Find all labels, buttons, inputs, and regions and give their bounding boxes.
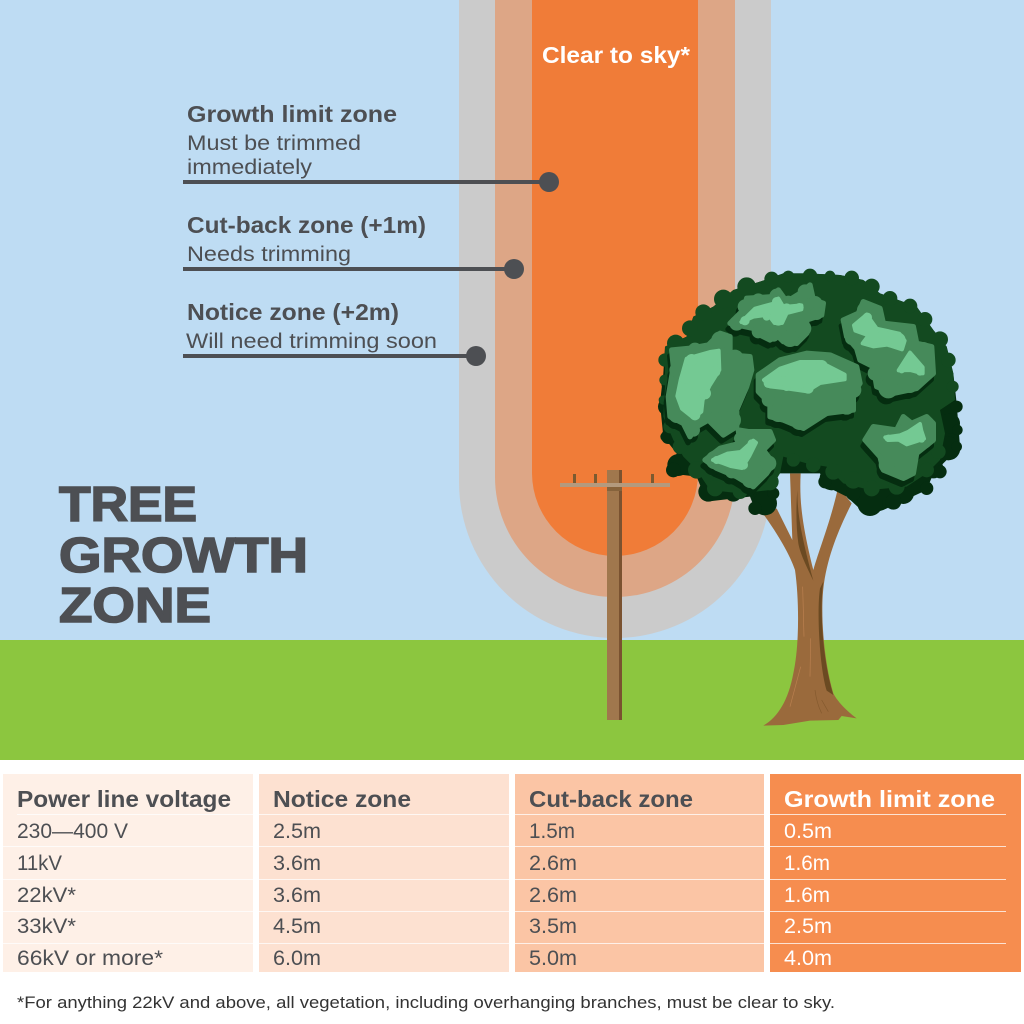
callout: notice zone: Notice zone (+2m) (187, 299, 399, 325)
sky background (0, 0, 1024, 640)
table column: cut-back zone: 1.5m (529, 820, 575, 843)
callout: cut-back zone: Cut-back zone (+1m) (187, 212, 426, 238)
callout: growth limit zone: Growth limit zone (187, 101, 397, 127)
title: ZONE (59, 579, 211, 633)
table column: growth limit zone: 4.0m (784, 947, 832, 970)
table column: growth limit zone: 1.6m (784, 884, 830, 907)
clear to sky label: Clear to sky* (542, 42, 690, 68)
cut-back zone band (495, 0, 735, 597)
tree trunk (763, 473, 857, 726)
footnote: *For anything 22kV and above, all vegetation, including overhanging branches, must be clear to sky. (17, 993, 835, 1012)
table column: power line voltage: 66kV or more* (17, 947, 163, 970)
callout: notice zone: Will need trimming soon (186, 330, 437, 353)
table column: power line voltage: 33kV* (17, 915, 76, 938)
foliage highlights light tone (676, 297, 925, 470)
table column: cut-back zone: 2.6m (529, 884, 577, 907)
ground (0, 640, 1024, 760)
callout: cut-back zone (183, 212, 524, 279)
table column: growth limit zone: Growth limit zone (784, 786, 995, 812)
title: GROWTH (59, 529, 308, 583)
tree crown (658, 269, 963, 516)
table column: power line voltage (3, 774, 253, 972)
table column: power line voltage: 230—400 V (17, 820, 128, 843)
title (59, 478, 308, 633)
notice zone band (459, 0, 771, 638)
foliage highlights mid tone (666, 284, 935, 488)
table column: cut-back zone: 2.6m (529, 852, 577, 875)
callout: notice zone (183, 299, 486, 366)
table column: cut-back zone: Cut-back zone (529, 786, 693, 812)
callout: cut-back zone: Needs trimming (187, 243, 351, 266)
table column: power line voltage: 11kV (17, 852, 62, 875)
title: TREE (59, 478, 197, 532)
table column: growth limit zone: 0.5m (784, 820, 832, 843)
callout: growth limit zone (183, 101, 559, 192)
table column: notice zone (259, 774, 509, 972)
table column: cut-back zone (515, 774, 764, 972)
foliage shadows (664, 290, 933, 494)
table column: cut-back zone: 5.0m (529, 947, 577, 970)
table column: notice zone: Notice zone (273, 786, 411, 812)
crown main foliage (658, 269, 959, 499)
table column: notice zone: 4.5m (273, 915, 321, 938)
table column: notice zone: 3.6m (273, 884, 321, 907)
callout: growth limit zone: Must be trimmed (187, 132, 361, 155)
callout: growth limit zone: immediately (187, 156, 313, 179)
table column: notice zone: 3.6m (273, 852, 321, 875)
power pole (560, 470, 670, 720)
table column: cut-back zone: 3.5m (529, 915, 577, 938)
table column: power line voltage: 22kV* (17, 884, 76, 907)
table column: notice zone: 6.0m (273, 947, 321, 970)
table column: growth limit zone: 1.6m (784, 852, 830, 875)
crown shadow (658, 273, 963, 516)
table column: growth limit zone (770, 774, 1021, 972)
table column: notice zone: 2.5m (273, 820, 321, 843)
table column: power line voltage: Power line voltage (17, 786, 231, 812)
growth limit zone band (532, 0, 698, 556)
table column: growth limit zone: 2.5m (784, 915, 832, 938)
